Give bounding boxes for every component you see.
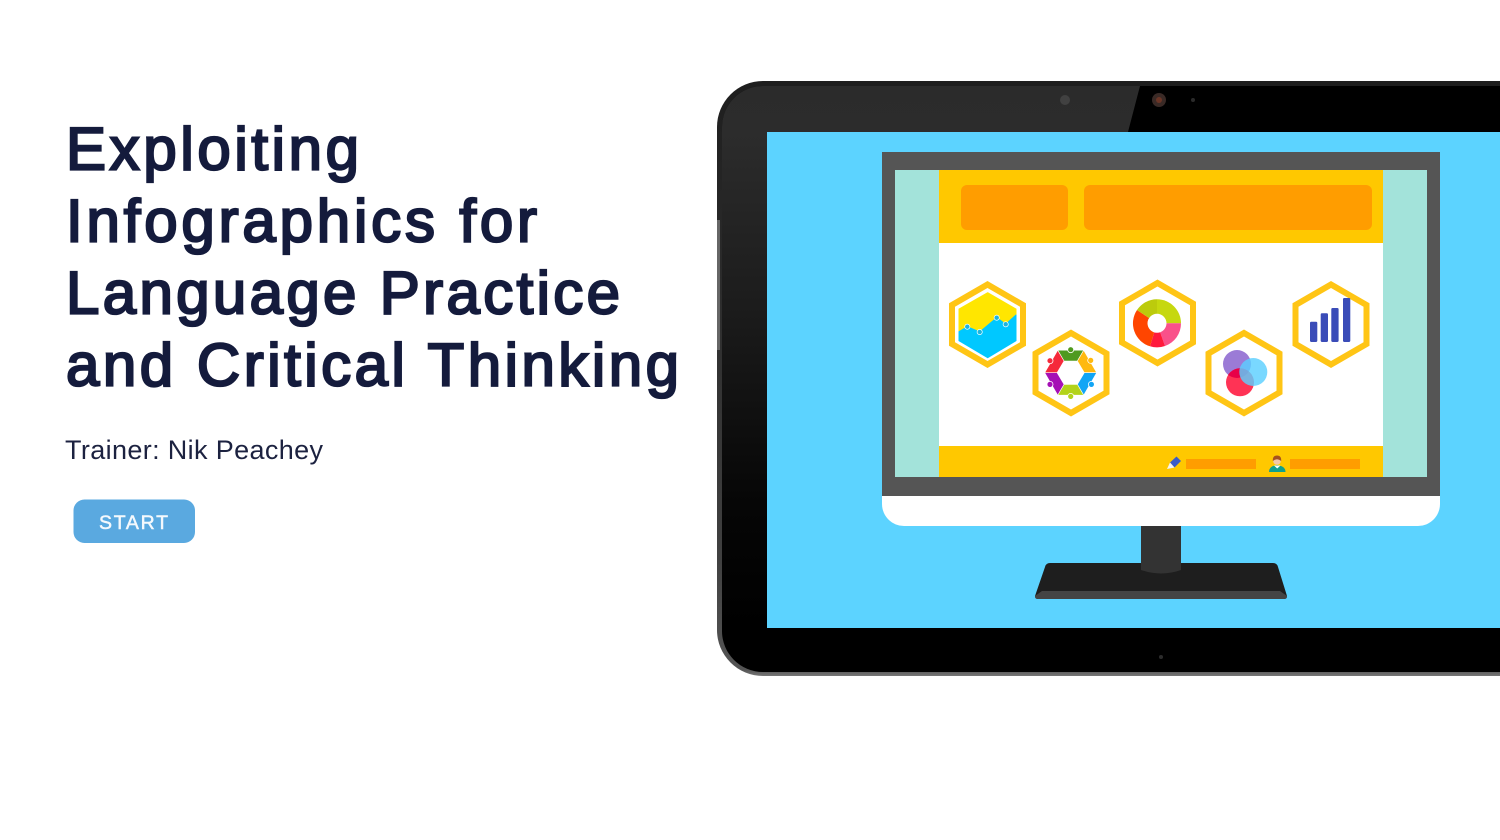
monitor chin bbox=[882, 496, 1440, 526]
title: Language Practice bbox=[66, 260, 620, 326]
title: Infographics for bbox=[66, 188, 537, 254]
side columns bbox=[895, 170, 1427, 477]
start button: START bbox=[99, 512, 168, 534]
hexagon: overlapping circles bbox=[1208, 333, 1280, 413]
tablet screen bbox=[767, 132, 1500, 628]
icon: person bbox=[1269, 456, 1286, 472]
monitor stand bbox=[1035, 526, 1287, 599]
page footer bbox=[939, 446, 1383, 477]
hexagon: donut chart bbox=[1122, 283, 1193, 363]
title: Exploiting bbox=[66, 116, 359, 182]
title: and Critical Thinking bbox=[66, 332, 679, 398]
tablet body bbox=[717, 81, 1500, 676]
title bbox=[66, 116, 679, 398]
tablet illustration bbox=[717, 81, 1500, 676]
page header bbox=[939, 170, 1383, 243]
hexagon: bar chart bbox=[1296, 284, 1366, 364]
icon: pencil bbox=[1167, 456, 1181, 469]
monitor bbox=[882, 152, 1440, 599]
trainer line: Trainer: Nik Peachey bbox=[65, 435, 324, 465]
start button bbox=[74, 500, 195, 543]
hexagon: ring of segments bbox=[1036, 333, 1106, 413]
page body bbox=[939, 243, 1383, 446]
slide bbox=[66, 81, 1500, 676]
monitor frame bbox=[882, 152, 1440, 496]
hexagon: area chart bbox=[952, 284, 1023, 364]
